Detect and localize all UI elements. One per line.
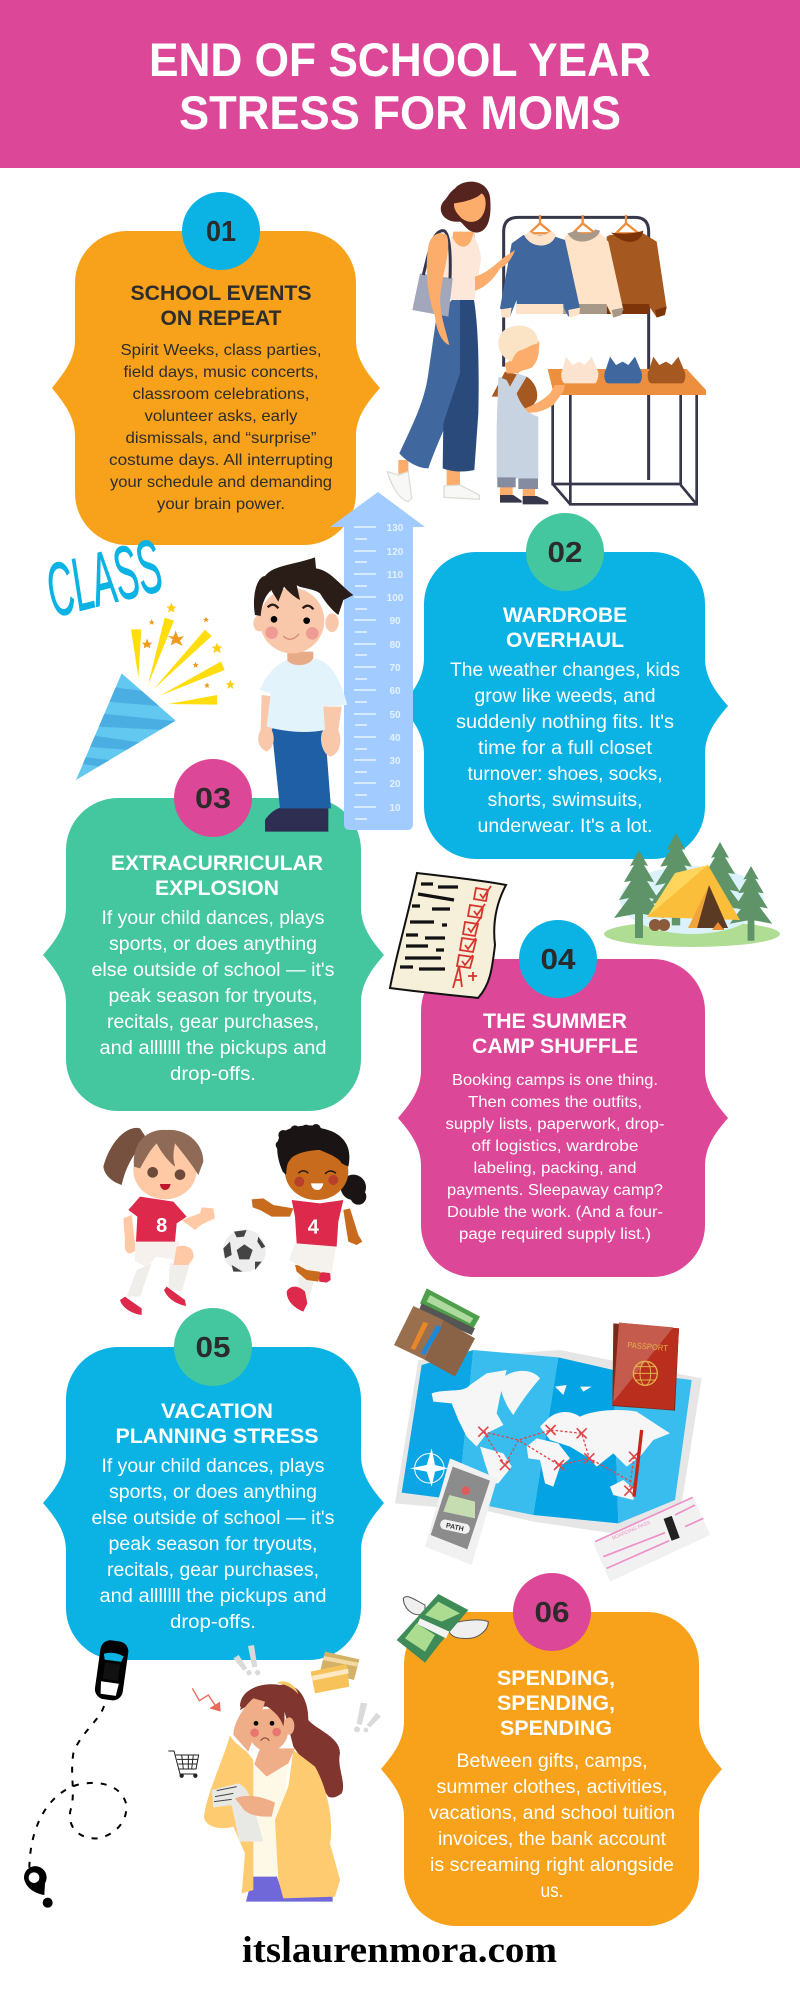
body text: grow like weeds, and [474,686,656,707]
body text: underwear. It's a lot. [478,816,652,837]
map base [395,1350,702,1533]
ruler ticks [354,527,376,819]
ruler numbers: 90 [389,616,401,627]
illustration: world map with travel items [394,1288,710,1582]
confetti rays [131,618,225,705]
child [492,326,565,504]
body text: shorts, swimsuits, [488,790,642,811]
passport [612,1323,679,1411]
body text: If your child dances, plays [102,1456,324,1477]
girl number 8 [103,1128,215,1315]
map pin [24,1866,53,1908]
title [149,33,651,139]
phone [425,1458,497,1565]
body text: else outside of school — it's [92,960,334,981]
body text: peak season for tryouts, [108,1534,318,1555]
number badge 02: 02 [548,537,582,569]
heading: EXPLOSION [155,877,279,900]
icon: exclamation marks [233,1645,381,1732]
heading [111,852,323,900]
folded clothes [561,357,598,383]
wallet and cash [394,1288,480,1377]
body text: is screaming right alongside [430,1855,674,1876]
heading: SPENDING, [497,1692,615,1715]
body text: If your child dances, plays [102,908,324,929]
number badge 03: 03 [195,783,231,815]
phone: PATH [445,1523,464,1533]
continents [432,1370,670,1500]
body text: recitals, gear purchases, [107,1560,319,1581]
body text [92,1456,334,1633]
number badge 05 [174,1308,252,1386]
illustration: camping tent and trees [604,833,780,947]
clothing rack [504,217,649,480]
title: STRESS FOR MOMS [179,86,621,139]
ruler numbers: 30 [389,756,401,767]
number badge 06 [513,1573,591,1651]
number badge 01 [182,192,260,270]
table [553,393,697,504]
body text: page required supply list.) [459,1226,651,1243]
number badge 05: 05 [196,1332,230,1364]
number badge 01: 01 [206,216,236,248]
body text: time for a full closet [478,738,653,759]
route [483,1430,634,1491]
body text: Double the work. (And a four- [447,1204,663,1221]
ruler numbers: 100 [387,593,404,604]
hangers [529,215,639,233]
illustration: mother and child shopping for clothes [387,182,706,504]
body text: drop-offs. [170,1064,256,1085]
body text [109,342,333,513]
stars [142,617,210,688]
illustration: checklist paper with A+ [390,873,506,998]
heading [503,604,627,652]
route markers [478,1425,639,1496]
body text [450,660,680,837]
number badge 06: 06 [534,1597,570,1629]
compass [410,1448,448,1487]
mother [387,182,515,502]
illustration: stressed mother with receipt [168,1645,381,1902]
illustration: boy [253,557,353,832]
body text: us. [540,1881,564,1902]
girl number 8: 8 [156,1215,167,1237]
map panels [402,1350,692,1523]
pen [634,1430,642,1497]
body text: classroom celebrations, [132,386,310,403]
body text: turnover: shoes, socks, [468,764,662,785]
body text: sports, or does anything [109,1482,317,1503]
body text: supply lists, paperwork, drop- [446,1116,664,1133]
body text: peak season for tryouts, [108,986,318,1007]
body text: volunteer asks, early [144,408,298,425]
heading: VACATION [161,1400,273,1423]
passport: PASSPORT [627,1340,668,1353]
ruler numbers: 60 [389,686,401,697]
heading: WARDROBE [503,604,627,627]
body text: labeling, packing, and [474,1160,636,1177]
body text: costume days. All interrupting [109,452,333,469]
number badge 04 [519,920,597,998]
body text: and alllllll the pickups and [100,1586,326,1607]
blue sweater [500,235,580,317]
panel: 06 spending [381,1573,722,1926]
illustration: route with car and map pin [24,1639,130,1908]
body text: your brain power. [157,496,285,513]
ruler numbers [387,523,404,814]
ruler numbers: 10 [389,803,401,814]
body text: sports, or does anything [109,934,317,955]
body text: dismissals, and “surprise” [126,430,316,447]
height ruler [330,492,425,830]
body text [446,1072,664,1243]
body text: suddenly nothing fits. It's [456,712,674,733]
panel: 03 extracurricular explosion [43,798,384,1111]
boarding pass [593,1497,710,1582]
icon: credit cards [311,1652,359,1693]
heading: THE SUMMER [483,1010,627,1033]
heading: PLANNING STRESS [116,1425,318,1448]
body text: recitals, gear purchases, [107,1012,319,1033]
body text: payments. Sleepaway camp? [447,1182,663,1199]
body text [92,908,334,1085]
girl number 4: 4 [308,1216,319,1238]
ruler numbers: 70 [389,663,401,674]
scribbled lines [400,884,458,969]
website footer: itslaurenmora.com [242,1930,557,1971]
dashed route [29,1706,126,1868]
icon: falling arrow [192,1688,221,1712]
body text: else outside of school — it's [92,1508,334,1529]
heading: SPENDING [500,1717,612,1740]
ruler numbers: 20 [389,779,401,790]
ruler numbers: 120 [387,547,404,558]
heading [497,1667,615,1740]
body text [429,1751,675,1902]
body text: and alllllll the pickups and [100,1038,326,1059]
heading: SCHOOL EVENTS [130,282,312,305]
body text: Between gifts, camps, [456,1751,648,1772]
ruler numbers: 80 [389,640,401,651]
panel: 02 wardrobe overhaul [401,513,728,859]
receipt [212,1783,263,1842]
brown sweater [607,233,667,317]
icon: CLASS lettering: CLASS [38,523,170,633]
body text: vacations, and school tuition [429,1803,675,1824]
heading: EXTRACURRICULAR [111,852,323,875]
body text: invoices, the bank account [438,1829,667,1850]
body text: drop-offs. [170,1612,256,1633]
body text: Booking camps is one thing. [452,1072,658,1089]
body text: Then comes the outfits, [468,1094,642,1111]
car [94,1639,130,1702]
panel: 01 school events [52,192,380,545]
ruler numbers: 110 [387,570,404,581]
heading [116,1400,318,1448]
body text: summer clothes, activities, [436,1777,668,1798]
illustration: flying money [397,1594,488,1663]
red checks [453,886,491,988]
heading: ON REPEAT [160,307,282,330]
illustration: two girls playing soccer [103,1124,366,1315]
title: END OF SCHOOL YEAR [149,33,651,86]
heading [130,282,312,330]
icon: shopping cart [168,1751,199,1777]
body text: Spirit Weeks, class parties, [120,342,322,359]
boarding pass: BOARDING PASS [611,1520,652,1541]
heading: OVERHAUL [506,629,624,652]
number badge 03 [174,759,252,837]
number badge 04: 04 [540,944,576,976]
panel: 05 vacation planning stress [43,1308,384,1660]
ruler numbers: 50 [389,710,401,721]
number badge 02 [526,513,604,591]
body text: The weather changes, kids [450,660,680,681]
ruler numbers: 40 [389,733,401,744]
soccer ball [223,1229,266,1272]
heading: SPENDING, [497,1667,615,1690]
body text: your schedule and demanding [110,474,332,491]
heading [472,1010,638,1058]
heading: CAMP SHUFFLE [472,1035,638,1058]
illustration: party popper [76,603,235,780]
body text: off logistics, wardrobe [472,1138,639,1155]
girl number 4 [252,1124,366,1312]
cream sweater [563,233,623,317]
body text: field days, music concerts, [124,364,318,381]
ruler numbers: 130 [387,523,404,534]
panel: 04 summer camp shuffle [398,959,728,1277]
header banner with title [0,0,800,168]
